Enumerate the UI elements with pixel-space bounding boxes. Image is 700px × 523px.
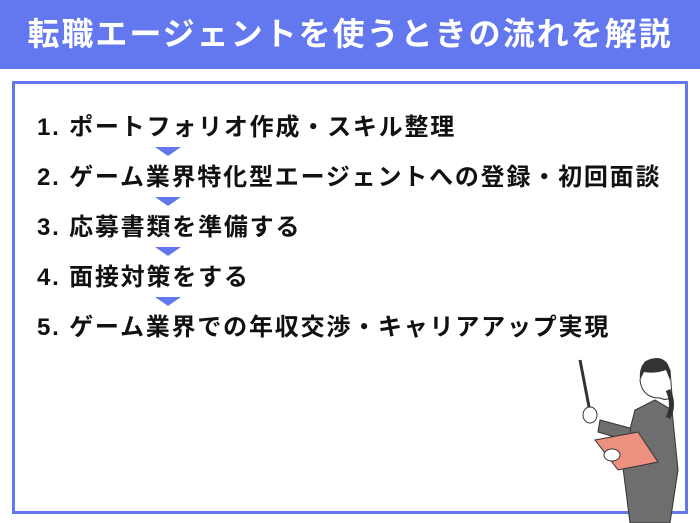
step 2: 2. ゲーム業界特化型エージェントへの登録・初回面談 bbox=[37, 164, 661, 191]
title: 転職エージェントを使うときの流れを解説 bbox=[27, 16, 673, 52]
illustration: woman with pointer and clipboard bbox=[578, 358, 678, 523]
arrow 4 bbox=[155, 297, 181, 306]
title bbox=[0, 0, 700, 69]
step 4: 4. 面接対策をする bbox=[37, 264, 250, 291]
step 1: 1. ポートフォリオ作成・スキル整理 bbox=[37, 114, 456, 141]
arrow 1 bbox=[155, 147, 181, 156]
step 3: 3. 応募書類を準備する bbox=[37, 214, 301, 241]
arrow 2 bbox=[155, 197, 181, 206]
step 5: 5. ゲーム業界での年収交渉・キャリアアップ実現 bbox=[37, 314, 610, 341]
arrow 3 bbox=[155, 247, 181, 256]
panel: steps bbox=[12, 81, 688, 514]
